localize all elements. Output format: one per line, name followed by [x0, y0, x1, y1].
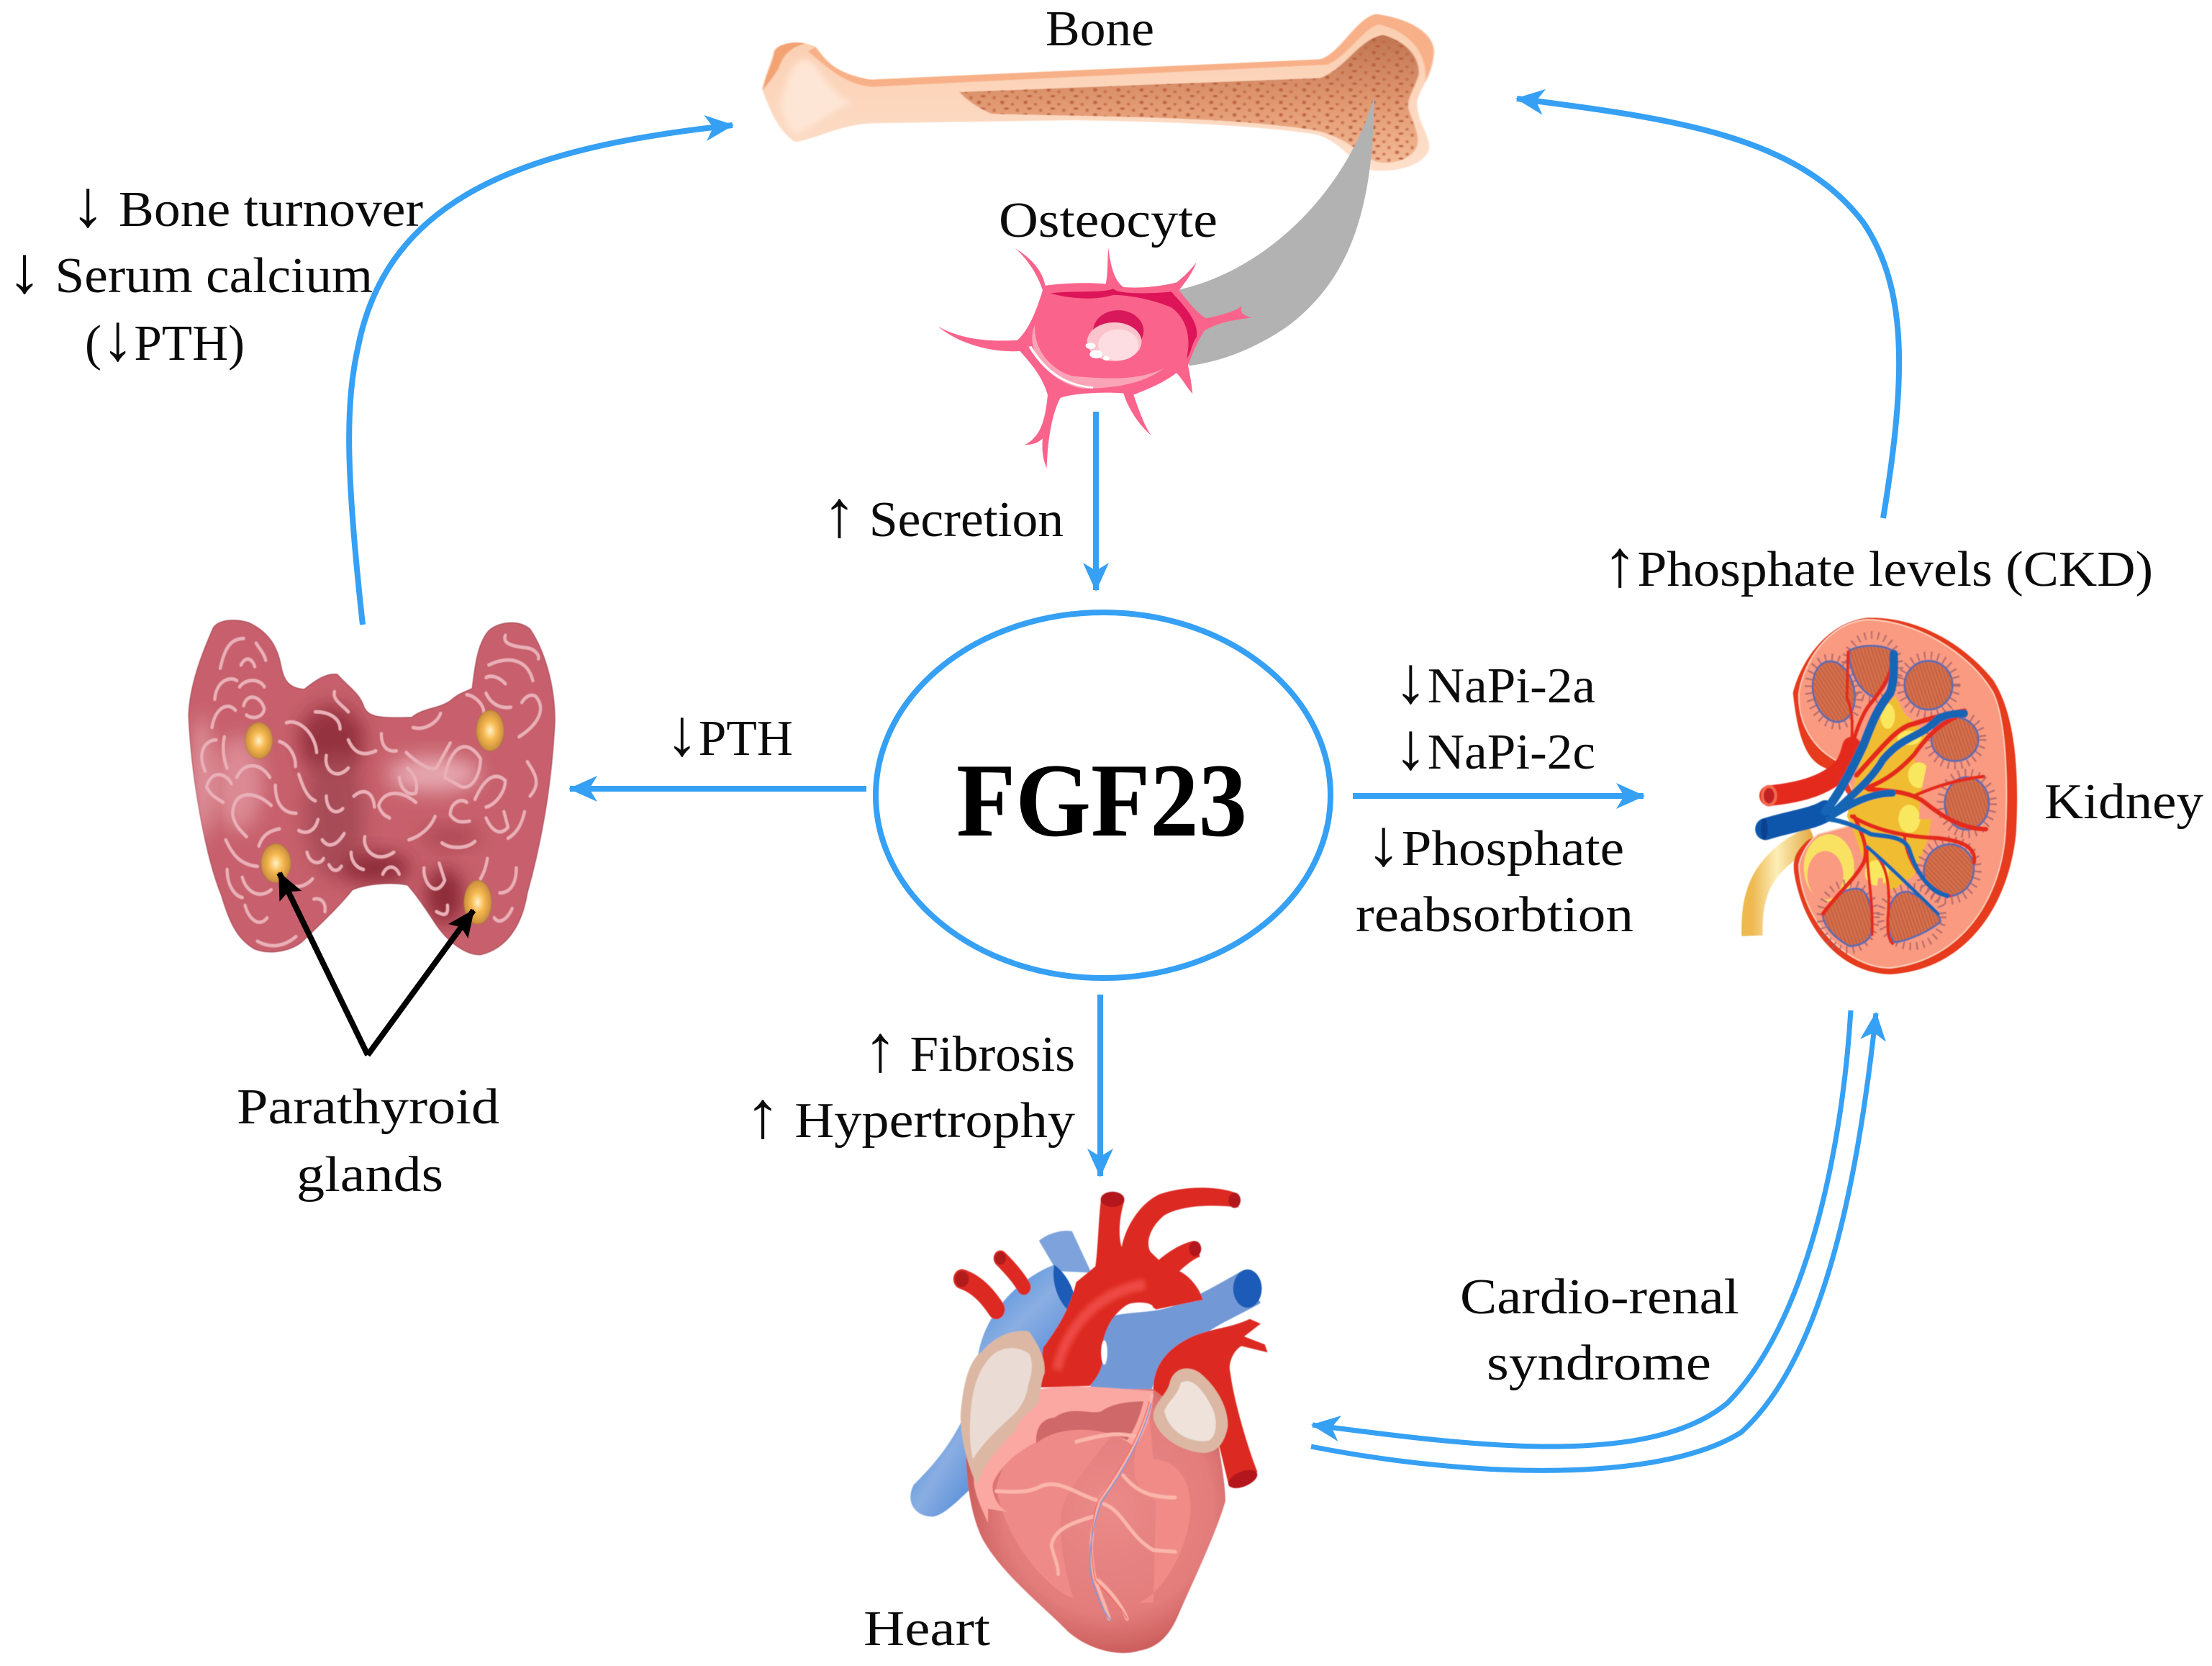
label: Bone: Bone: [1046, 1, 1154, 57]
renal sinus: [1847, 695, 1936, 891]
lower pale pyramid: [1804, 834, 1854, 901]
arrow: FGF23 to parathyroid: [570, 786, 866, 792]
gaps between vessels: [1126, 1303, 1153, 1311]
arrow: parathyroid label pointers: [279, 873, 473, 1055]
FGF23 ellipse: [876, 612, 1331, 978]
text: kidney effects: reabsorbtion: [1356, 887, 1633, 943]
arrow: heart to kidney: [1311, 1013, 1876, 1470]
vena cava lower: [910, 1418, 971, 1517]
label: Heart: Heart: [864, 1601, 991, 1657]
icon: heart: [910, 1187, 1268, 1653]
icon: thyroid with parathyroid glands: [189, 620, 555, 955]
arrow: FGF23 to heart: [1097, 995, 1103, 1176]
arrow: kidney to heart: [1313, 1010, 1851, 1447]
text: kidney effects: ↓NaPi-2a: [1394, 643, 1595, 717]
top vessels blue: [1039, 1231, 1092, 1272]
text: kidney effects: [1356, 643, 1633, 943]
label: Osteocyte: Osteocyte: [999, 193, 1218, 248]
text: kidney effects: ↓NaPi-2c: [1394, 710, 1595, 783]
auricles: [961, 1331, 1045, 1485]
renal vein: [1765, 654, 1964, 914]
pulmonary vein red: [1153, 1319, 1268, 1486]
pyramids: [1802, 635, 1993, 950]
pulmonary trunk: [1090, 1271, 1261, 1389]
label: Cardio-renal syndrome: syndrome: [1487, 1336, 1711, 1391]
text: heart effects: ↑ Fibrosis: [864, 1012, 1075, 1085]
label: PTH decrease: ↓PTH: [666, 696, 793, 769]
label: Parathyroid glands: [237, 1079, 499, 1203]
label: Parathyroid glands: glands: [296, 1147, 443, 1203]
label: secretion: ↑ Secretion: [822, 477, 1064, 551]
text: bone effects: ↓ Serum calcium: [7, 233, 373, 307]
label: phosphate levels: ↑Phosphate levels (CKD): [1603, 527, 2153, 600]
label: Cardio-renal syndrome: Cardio-renal: [1460, 1269, 1739, 1325]
text: bone effects: ↓ Bone turnover: [71, 167, 423, 240]
renal artery: [1769, 652, 1986, 943]
icon: bone: [763, 14, 1434, 171]
aorta: [1039, 1187, 1238, 1387]
heading: FGF23: FGF23: [956, 742, 1247, 859]
label: Kidney: Kidney: [2044, 774, 2203, 830]
arrow: parathyroid to bone: [349, 125, 733, 625]
arrow: osteocyte to FGF23: [1093, 412, 1099, 590]
ureter: [1752, 837, 1813, 936]
text: kidney effects: ↓Phosphate: [1366, 806, 1624, 879]
label: Cardio-renal syndrome: [1460, 1269, 1739, 1391]
arrow: kidney phosphate to bone: [1517, 99, 1899, 518]
coronary vessels: [997, 1395, 1175, 1621]
text: bone effects: (↓PTH): [85, 301, 245, 374]
icon: kidney: [1752, 617, 2017, 974]
text: heart effects: [745, 1012, 1075, 1151]
label: Parathyroid glands: Parathyroid: [237, 1079, 499, 1135]
icon: osteocyte cell: [938, 248, 1252, 468]
text: heart effects: ↑ Hypertrophy: [745, 1078, 1075, 1151]
ventricles: [966, 1389, 1225, 1653]
arrow: FGF23 to kidney: [1353, 793, 1644, 799]
left branches red: [962, 1259, 1024, 1309]
text: bone effects: [7, 167, 423, 374]
connector: zoom wedge from bone to osteocyte: [1177, 96, 1374, 366]
